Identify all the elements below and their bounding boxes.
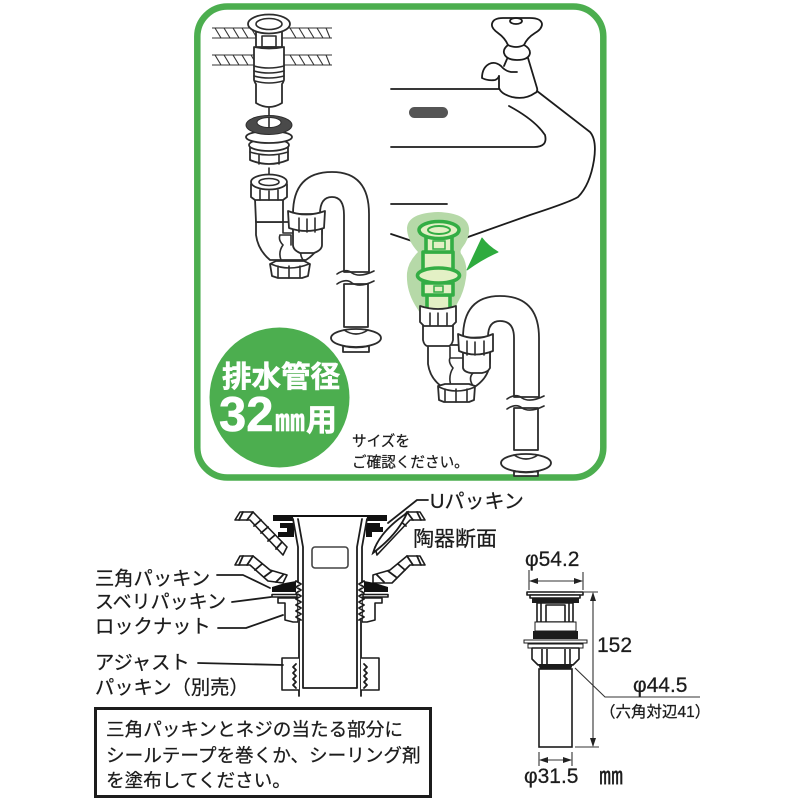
panel: green rounded frame bbox=[197, 6, 603, 478]
central drain tube bbox=[293, 517, 367, 696]
halo bbox=[407, 212, 469, 318]
black top flange and U packing bbox=[273, 513, 407, 553]
unit: millimetres: ㎜ bbox=[599, 763, 623, 790]
label: U packing bbox=[388, 491, 524, 523]
dimension: height bbox=[575, 592, 632, 747]
dimension: top diameter bbox=[525, 548, 583, 590]
diagram: exploded drain assembly bbox=[212, 14, 381, 352]
lower gaskets bbox=[272, 581, 388, 622]
badge suffix: 用 bbox=[306, 403, 337, 438]
arrow: green pointer to drain bbox=[467, 238, 498, 270]
dimension: height: 152 bbox=[597, 634, 632, 657]
counter cross-section hatching bbox=[212, 28, 332, 65]
label: lock nut bbox=[95, 615, 283, 638]
dimension: tube diameter bbox=[524, 752, 578, 788]
drain silhouette bbox=[524, 592, 587, 747]
dimension: hex diameter: （六角対辺41） bbox=[600, 703, 710, 721]
dimension: hex diameter: φ44.5 bbox=[633, 674, 688, 697]
callout: sealing note box: を塗布してください。 bbox=[106, 770, 291, 791]
gasket and lock nut bbox=[246, 116, 292, 178]
sink outline bbox=[391, 89, 546, 204]
tube window bbox=[312, 547, 348, 568]
label: triangle packing bbox=[95, 568, 270, 590]
text: please check size: サイズを bbox=[352, 433, 410, 450]
badge unit: ㎜ bbox=[275, 405, 305, 438]
threads bbox=[296, 581, 364, 620]
label: triangle packing: 三角パッキン bbox=[95, 568, 210, 590]
dimension: top diameter: φ54.2 bbox=[525, 548, 580, 571]
S-bend riser bbox=[463, 296, 539, 397]
callout: sealing note box bbox=[96, 708, 430, 796]
highlighted drain body bbox=[418, 222, 460, 312]
ceramic hatching bbox=[235, 512, 425, 583]
diagram: installed trap bbox=[420, 296, 551, 476]
icon: faucet bbox=[482, 18, 542, 98]
label: adjust packing: アジャスト bbox=[95, 653, 190, 674]
badge value: 32 bbox=[219, 388, 274, 442]
basin curve bbox=[391, 91, 595, 252]
label: adjust packing bbox=[95, 653, 283, 699]
badge heading: 排水管径 bbox=[222, 361, 341, 394]
label: slide packing: スベリパッキン bbox=[95, 592, 226, 613]
overflow slot bbox=[409, 107, 448, 118]
diagram: cross-section of installed drain bbox=[235, 512, 425, 696]
callout: sealing note box: シールテープを巻くか、シーリング剤 bbox=[106, 745, 421, 766]
diagram: dimensioned drain side view bbox=[524, 548, 710, 790]
diagram: installed sink with faucet bbox=[391, 18, 595, 252]
label: ceramic cross-section: 陶器断面 bbox=[413, 528, 497, 551]
adjust packing boxes bbox=[282, 658, 379, 690]
S-bend riser bbox=[293, 172, 369, 272]
label: lock nut: ロックナット bbox=[95, 616, 211, 638]
badge: drain pipe diameter 32mm bbox=[210, 328, 350, 468]
label: U packing: Uパッキン bbox=[430, 491, 524, 513]
dimension: tube diameter: φ31.5 bbox=[524, 765, 578, 788]
callout: sealing note box: 三角パッキンとネジの当たる部分に bbox=[106, 719, 403, 740]
drain body with flange bbox=[248, 14, 290, 118]
label: adjust packing: パッキン（別売） bbox=[95, 677, 249, 699]
P-trap with nuts bbox=[251, 172, 381, 352]
text: please check size: ご確認ください。 bbox=[352, 454, 469, 471]
dimension: hex diameter bbox=[575, 668, 710, 721]
icon: highlighted green drain with halo bbox=[407, 212, 469, 318]
